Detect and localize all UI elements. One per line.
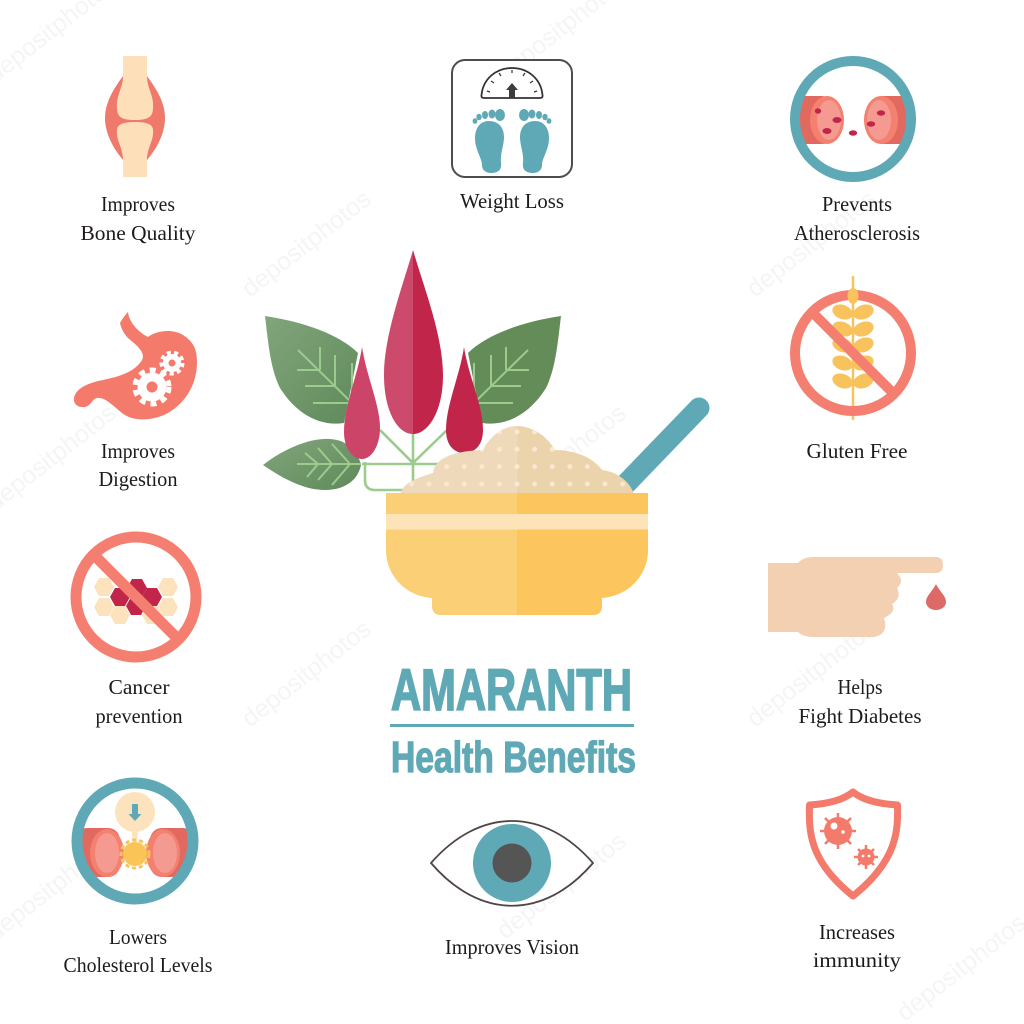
icon: shield with viruses <box>809 792 898 896</box>
item: lowers cholesterol <box>64 783 212 977</box>
label: prevention <box>96 704 183 728</box>
bud: left <box>344 347 380 459</box>
icon: crossed cells <box>76 537 196 657</box>
item: diabetes <box>768 557 946 728</box>
bud: large center <box>384 250 443 434</box>
watermark: depositphotos <box>491 399 631 517</box>
label: Gluten Free <box>806 439 908 463</box>
icon: clear artery <box>790 61 916 177</box>
label: Digestion <box>98 467 178 491</box>
label: Improves Vision <box>445 935 579 959</box>
watermark: depositphotos <box>741 185 881 303</box>
item: prevents atherosclerosis <box>790 61 920 245</box>
label: Bone Quality <box>80 221 196 245</box>
subtitle: Health Benefits: Health Benefits <box>391 733 636 782</box>
watermark: depositphotos <box>741 615 881 733</box>
spoon <box>620 408 699 490</box>
label: Cholesterol Levels <box>64 953 212 977</box>
watermark: depositphotos <box>236 615 376 733</box>
icon: pricked finger <box>768 557 946 637</box>
stems <box>362 430 447 492</box>
icon: bathroom scale <box>452 60 572 177</box>
label: Lowers <box>109 925 167 949</box>
label: Fight Diabetes <box>798 704 922 728</box>
leaf: upper right <box>468 316 561 424</box>
item: immunity <box>809 792 902 972</box>
label: Improves <box>101 439 175 463</box>
icon: artery with plaque <box>75 783 195 899</box>
illustration: amaranth plant and bowl <box>263 250 699 615</box>
label: Atherosclerosis <box>794 221 920 245</box>
item: bone quality <box>80 56 196 245</box>
watermark: depositphotos <box>236 185 376 303</box>
icon: joint <box>105 56 165 177</box>
bud: right <box>446 347 483 453</box>
label: immunity <box>813 948 902 972</box>
item: cancer prevention <box>76 537 196 728</box>
item: improves vision <box>431 821 593 959</box>
item: improves digestion <box>74 312 197 491</box>
grain mound <box>400 426 634 494</box>
watermark: depositphotos <box>491 827 631 945</box>
left foot <box>473 109 505 173</box>
label: Improves <box>101 192 175 216</box>
leaf: lower left <box>263 439 361 490</box>
title: AMARANTH: AMARANTH <box>391 658 632 723</box>
leaf: upper left <box>265 316 358 424</box>
label: Helps <box>838 675 882 699</box>
label: Increases <box>819 920 895 944</box>
title block <box>390 658 636 782</box>
label: Prevents <box>822 192 892 216</box>
label: Cancer <box>108 675 170 699</box>
bowl <box>386 493 648 615</box>
item: gluten free <box>795 276 911 463</box>
icon: eye <box>431 821 593 906</box>
icon: stomach with gears <box>74 312 197 419</box>
right foot <box>519 109 551 173</box>
item: weight loss <box>452 60 572 213</box>
icon: crossed wheat <box>795 276 911 420</box>
label: Weight Loss <box>460 189 564 213</box>
